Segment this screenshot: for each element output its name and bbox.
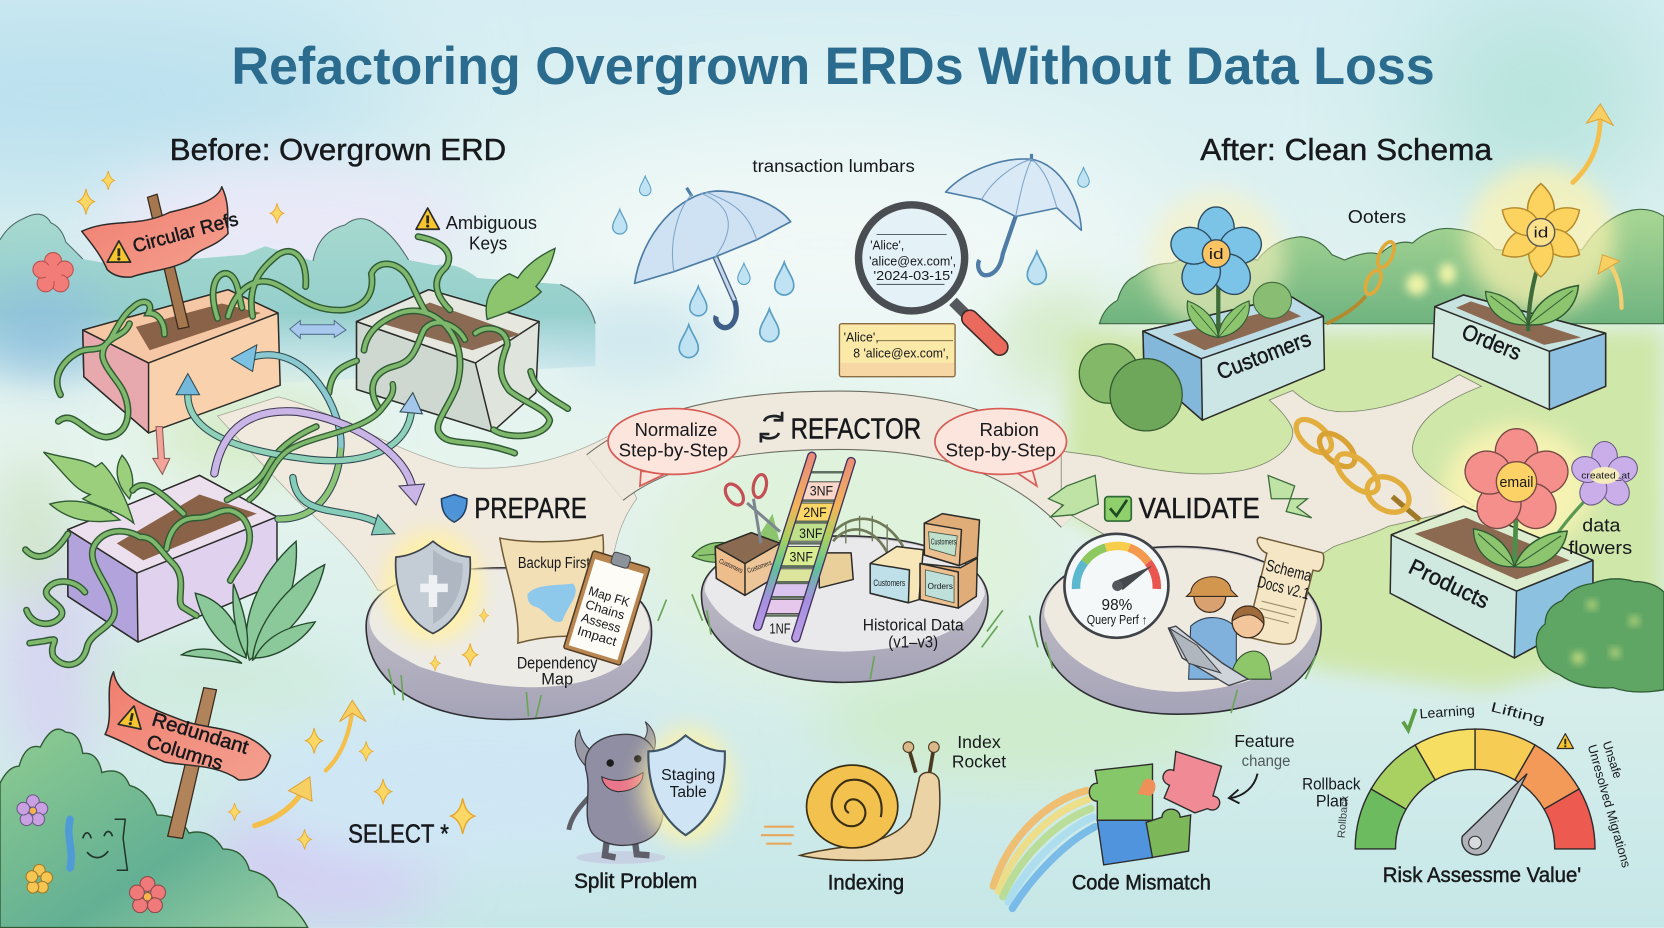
label: Ambiguous [446, 213, 537, 233]
bush bottom left with sign: Columns [144, 731, 226, 775]
speech bubble: rollout: Rabion [980, 419, 1039, 440]
decoration: red flower and sparkles [33, 171, 284, 292]
right label: Unresolved Migrations [1585, 743, 1634, 869]
archive boxes: historical data: Customers [931, 537, 956, 546]
heading: refactor [761, 412, 921, 445]
umbrella left with rain drops [613, 176, 794, 358]
plant: spiky leaves [181, 541, 325, 663]
warning icon [1557, 734, 1573, 748]
large gold chain [1290, 413, 1420, 520]
body [585, 734, 663, 845]
speech bubble: normalize [608, 409, 740, 486]
flower [1496, 184, 1586, 277]
ladder: 1NF to 3NF [758, 456, 851, 638]
heading: prepare: PREPARE [474, 493, 587, 525]
scissors [747, 499, 780, 543]
cardboard planter with scissors: Customers [746, 560, 773, 575]
caption: indexing: Indexing [828, 871, 904, 894]
planter: peach with circular refs sign [82, 187, 280, 433]
map blob [527, 584, 576, 622]
caption: code mismatch: Code Mismatch [1072, 871, 1211, 894]
archive boxes: historical data: Orders [928, 581, 953, 591]
icon: silver shield [384, 532, 482, 642]
label: feature change with arrow: change [1242, 753, 1291, 770]
speech bubble: normalize: Normalize [635, 419, 717, 440]
puzzle pieces: code mismatch [1089, 751, 1221, 865]
post [168, 688, 216, 838]
caption: historical data: Historical Data [863, 616, 964, 634]
caption: data flowers: flowers [1568, 537, 1632, 558]
schema docs scroll [1234, 537, 1326, 650]
leaf [486, 248, 555, 319]
caption: transaction lumbars: transaction lumbars [752, 156, 915, 176]
data row card: 'Alice', [844, 330, 879, 345]
planter: orders with id flower: id [1533, 226, 1548, 242]
label: Orders [1458, 319, 1525, 365]
label: index rocket: Index [957, 732, 1001, 752]
tangled vines [25, 237, 568, 665]
planter: products with data flowers [1390, 424, 1641, 658]
dark bush bottom right [1536, 579, 1664, 692]
umbrella right with rain drops [946, 154, 1089, 284]
small round bushes [1079, 344, 1182, 431]
schema docs scroll: Schema [1264, 557, 1314, 586]
speech bubble: rollout: Step-by-Step [946, 439, 1056, 460]
stone path: left branch [218, 397, 637, 594]
ladder: 1NF to 3NF: 2NF [803, 505, 827, 520]
people with laptop [1168, 577, 1271, 686]
grass tufts on platforms [388, 594, 1316, 717]
speech bubble: rollout [935, 409, 1067, 486]
clipboard: Impact [576, 623, 619, 649]
bushes: right background [1099, 209, 1664, 324]
horns [575, 722, 655, 766]
arrows: tangled foreign keys [153, 320, 424, 535]
label: select star: SELECT * [348, 821, 449, 849]
bridge [833, 516, 903, 557]
speech bubble: normalize: Step-by-Step [619, 439, 728, 460]
arrow: teal lower [293, 478, 395, 535]
monster with staging table shield: Staging [661, 767, 715, 784]
label: feature change with arrow [1229, 731, 1295, 803]
risk assessment gauge: Unsafe [1600, 739, 1626, 780]
data row card: 8 'alice@ex.com', [853, 346, 949, 361]
caption: data flowers [1568, 515, 1632, 558]
risk assessment gauge: Plan [1316, 793, 1348, 811]
text: Redundant [149, 709, 252, 759]
heading: before: Before: Overgrown ERD [170, 132, 506, 167]
label: feature change with arrow: Feature [1234, 731, 1295, 751]
clipboard: Chains [584, 596, 627, 623]
top label: Learning [1419, 703, 1475, 721]
stem and leaves [1216, 281, 1220, 335]
bracket face [69, 819, 71, 868]
platform: VALIDATE [1040, 547, 1321, 714]
needle [1462, 774, 1527, 855]
arrow: teal two-way [176, 374, 422, 461]
planter: orders with id flower [1433, 164, 1615, 410]
rollback plan label: Rollback [1302, 776, 1361, 794]
performance gauge: 98%: 98% [1102, 597, 1132, 614]
cardboard planter with scissors [692, 473, 780, 595]
yellow growth arrows [1573, 104, 1622, 308]
bush bottom left with sign [0, 672, 308, 928]
purple flower [1568, 441, 1641, 510]
magnifying glass [859, 205, 1000, 347]
sparkles on prepare platform [430, 609, 489, 671]
arrow: pink down [153, 427, 170, 474]
heading: validate: VALIDATE [1139, 493, 1260, 525]
warning icon [118, 704, 145, 729]
leaves [44, 452, 134, 523]
scroll: backup first and dependency map: Backup First [518, 555, 591, 572]
warning icon [107, 241, 131, 262]
scroll: backup first and dependency map [500, 535, 603, 643]
rung labels: 3NF [810, 484, 833, 499]
risk assessment gauge: Lifting [1489, 699, 1546, 727]
snail: index rocket [761, 742, 940, 860]
caption: split problem: Split Problem [574, 870, 697, 893]
caption: map: Map [541, 670, 573, 688]
arrow: purple [214, 411, 424, 505]
performance gauge: 98% [1064, 534, 1168, 638]
flower [1166, 207, 1266, 302]
check mark [1403, 709, 1416, 730]
flag [105, 672, 271, 780]
stone path: central arc [605, 420, 1082, 507]
planter: gray with ambiguous keys: Keys [469, 233, 507, 253]
arrow: blue loop [231, 345, 341, 519]
vine crossing the arrows [249, 384, 393, 500]
planter: customers with id flower: id [1209, 247, 1224, 263]
title: Refactoring Overgrown ERDs Without Data Loss [231, 37, 1435, 96]
caption: Risk Assessme Value' [1383, 864, 1581, 887]
caption: ooters: Ooters [1348, 206, 1406, 227]
data row card [839, 324, 955, 377]
clipboard: Map FK [587, 583, 632, 610]
archive boxes: historical data: Customers [873, 578, 906, 588]
ground: right lawn [1061, 329, 1664, 690]
planter: gray with ambiguous keys [357, 208, 555, 432]
clipboard [563, 546, 652, 665]
schema docs scroll: Docs v2.1 [1255, 573, 1311, 603]
arrow: blue double [290, 320, 346, 339]
label: Customers [1213, 326, 1314, 385]
caption: data flowers: data [1582, 515, 1621, 536]
lens text: 'Alice', [870, 237, 904, 252]
planter: products with data flowers: created_at [1581, 471, 1630, 482]
monster with staging table shield [569, 722, 734, 864]
shield [641, 727, 734, 844]
heading: prepare [441, 493, 587, 525]
sign flag [82, 187, 228, 277]
label: index rocket: Rocket [952, 751, 1006, 771]
label: Products [1405, 554, 1493, 614]
ribbons with check marks [1048, 475, 1312, 518]
planter: customers with id flower [1143, 191, 1324, 420]
warning icon [416, 208, 439, 229]
laptop [1168, 626, 1248, 686]
magnifying glass: '2024-03-15' [873, 268, 953, 283]
magnifying glass: 'alice@ex.com', [869, 253, 956, 268]
small shrub [1253, 282, 1292, 318]
sign post [148, 194, 189, 329]
rainbow trail [993, 791, 1095, 908]
legs and arm [605, 838, 649, 857]
cardboard planter with scissors: Customers [718, 558, 744, 575]
planter: products with data flowers: email [1500, 475, 1533, 491]
stone path: right branches [1061, 375, 1481, 568]
ladder: 1NF to 3NF: 1NF [769, 622, 791, 638]
risk assessment gauge [1302, 699, 1634, 887]
platform: PREPARE [366, 568, 652, 720]
bushes: left background [0, 214, 595, 398]
planter: purple [44, 452, 277, 642]
sign text: Circular Refs [131, 209, 241, 257]
heading: after: After: Clean Schema [1200, 132, 1493, 167]
clipboard: Assess [580, 610, 623, 636]
archive boxes: historical data [870, 514, 980, 608]
pink flower [1459, 429, 1574, 537]
face [606, 759, 614, 767]
ladder: 1NF to 3NF: 3NF [799, 526, 822, 541]
cardboard block behind ladder [819, 553, 853, 588]
label: index rocket [952, 732, 1006, 771]
monster with staging table shield: Table [670, 784, 707, 801]
left label: Rollback [1336, 795, 1351, 839]
ladder: 1NF to 3NF: 3NF [790, 549, 813, 564]
yellow arrows and sparkles [229, 700, 475, 850]
platform: REFACTOR [701, 536, 988, 682]
heading: refactor: REFACTOR [791, 413, 921, 445]
performance gauge: 98%: Query Perf ↑ [1087, 612, 1147, 627]
caption: dependency map: Dependency [517, 655, 598, 673]
flowers [17, 795, 48, 826]
small chain [1327, 240, 1398, 324]
caption: version range: (v1–v3) [888, 633, 938, 651]
